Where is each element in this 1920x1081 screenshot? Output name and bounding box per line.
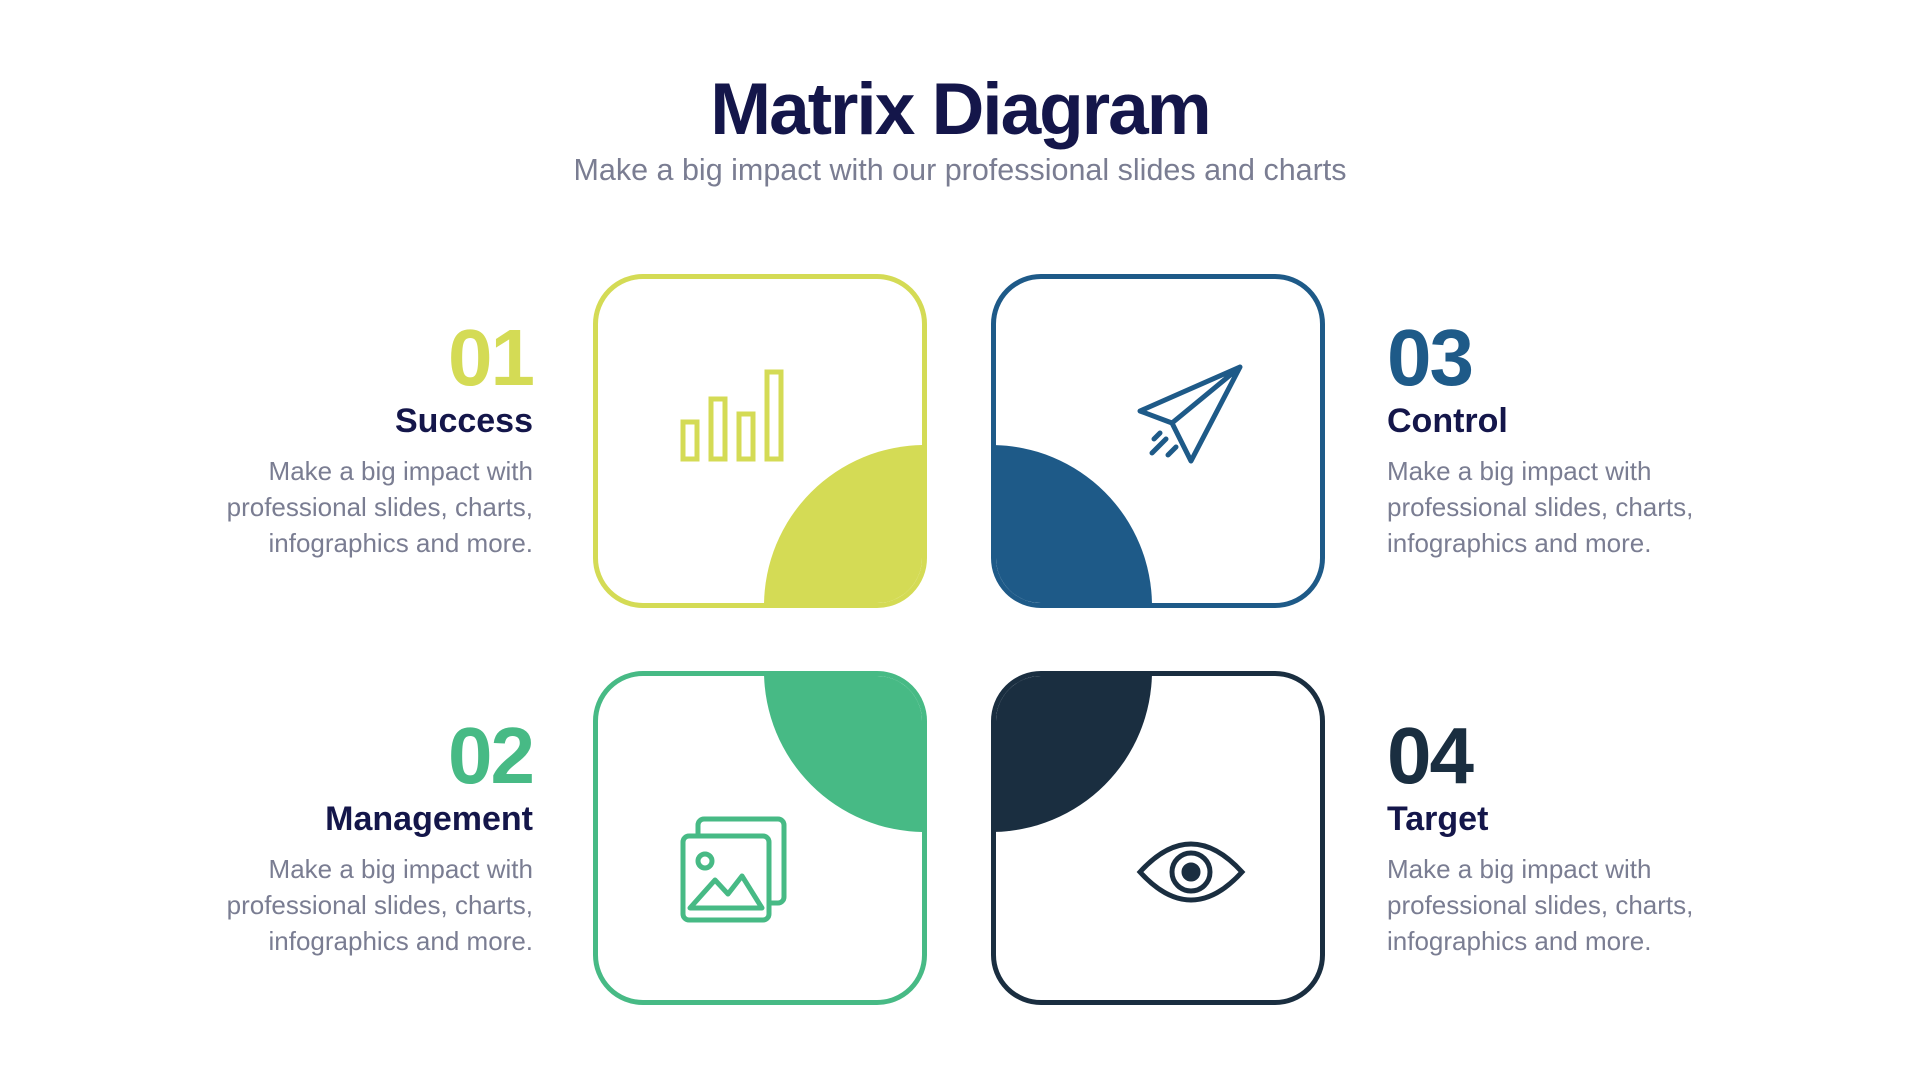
heading Success: Success — [395, 402, 533, 440]
number 01: 01 — [448, 313, 533, 402]
number 03: 03 — [1387, 313, 1472, 402]
body text: Make a big impact with professional slides, charts, infographics and more. — [227, 456, 533, 558]
panel: 04 target box — [991, 671, 1325, 1005]
quarter circle blue — [830, 445, 1152, 767]
title: Matrix Diagram — [710, 69, 1210, 150]
quarter circle yellow — [764, 445, 1086, 767]
quarter circle green — [764, 510, 1086, 832]
heading Management: Management — [325, 800, 533, 838]
text block: 04 — [1387, 711, 1693, 956]
text block: 02 — [227, 711, 533, 956]
body text: Make a big impact with professional slides, charts, infographics and more. — [227, 854, 533, 956]
heading Target: Target — [1387, 800, 1488, 838]
text block: 03 — [1387, 313, 1693, 558]
number 02: 02 — [448, 711, 533, 800]
text block: 01 — [227, 313, 533, 558]
number 04: 04 — [1387, 711, 1472, 800]
quarter circle dark — [830, 510, 1152, 832]
body text: Make a big impact with professional slides, charts, infographics and more. — [1387, 854, 1693, 956]
icon: bar chart — [680, 370, 784, 462]
panel: 01 success box — [593, 274, 927, 608]
heading Control: Control — [1387, 402, 1508, 440]
subtitle: Make a big impact with our professional slides and charts — [573, 153, 1347, 187]
panel: 03 control box — [991, 274, 1325, 608]
icon: eye — [1136, 842, 1246, 902]
body text: Make a big impact with professional slides, charts, infographics and more. — [1387, 456, 1693, 558]
icon: paper plane — [1138, 364, 1242, 464]
icon: images — [680, 816, 786, 922]
panel: 02 management box — [593, 671, 927, 1005]
